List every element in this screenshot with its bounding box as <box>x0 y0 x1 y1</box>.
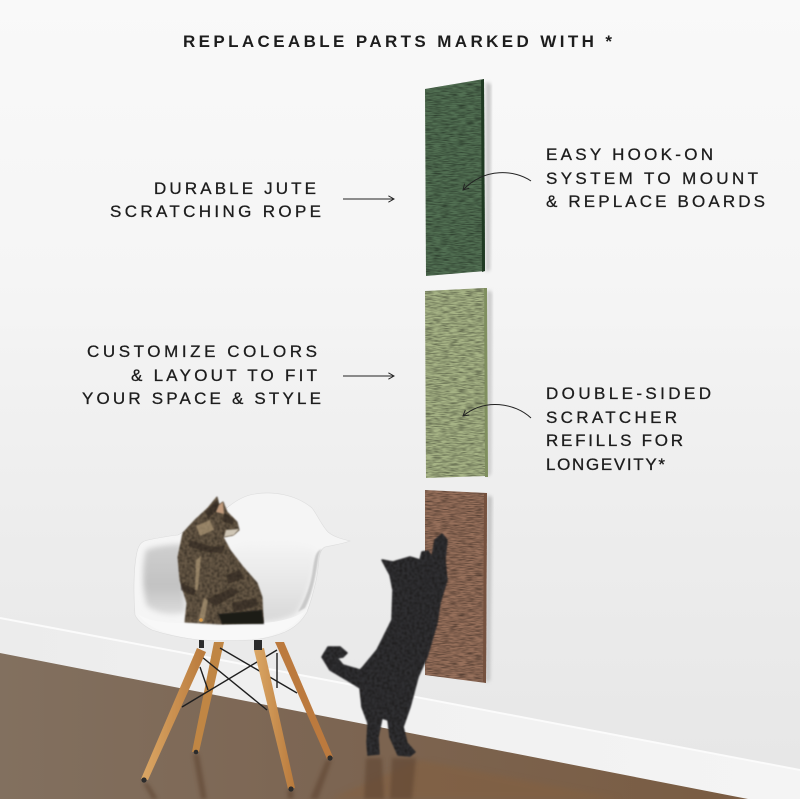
chair shell <box>134 493 350 641</box>
chair back-right leg <box>275 642 333 759</box>
tabby tail <box>218 610 264 624</box>
arrow: to sage board <box>343 375 394 377</box>
arrow: curved to sage board <box>463 404 531 418</box>
chair <box>134 493 350 792</box>
text block: hook-on system: & REPLACE BOARDS <box>546 192 765 211</box>
chair wire base <box>182 648 297 710</box>
black cat <box>322 534 447 756</box>
tabby muzzle <box>224 529 239 537</box>
text block: hook-on system: SYSTEM TO MOUNT <box>546 169 758 188</box>
tabby stripes <box>181 500 258 612</box>
leg and cat reflections <box>143 754 416 799</box>
tabby cat <box>178 497 264 624</box>
chair inner left shadow <box>143 544 186 614</box>
text block: double-sided refills: LONGEVITY* <box>546 455 665 474</box>
tabby ear <box>216 502 224 514</box>
text block: durable jute <box>110 179 321 221</box>
chair inner right shadow <box>232 541 316 622</box>
text block: hook-on system: EASY HOOK-ON <box>546 145 713 164</box>
text block: double-sided refills: SCRATCHER <box>546 408 677 427</box>
wall scratcher board: sage <box>425 288 492 478</box>
text block: durable jute: DURABLE JUTE <box>154 179 316 198</box>
tabby light patches <box>195 520 214 622</box>
baseboard <box>0 618 800 799</box>
arrow: curved to green board <box>463 173 531 190</box>
title: REPLACEABLE PARTS MARKED WITH * <box>183 32 612 51</box>
wooden floor <box>0 653 748 799</box>
chair arm inner strip <box>298 549 322 612</box>
wall scratcher board: brown <box>425 490 492 683</box>
text block: double-sided refills <box>546 384 711 474</box>
chair seat rim <box>138 612 304 640</box>
chair front-left leg <box>141 648 206 780</box>
text block: hook-on system <box>546 145 765 211</box>
text block: customize colors: CUSTOMIZE COLORS <box>87 342 317 361</box>
chair back-left leg <box>192 642 224 752</box>
text block: customize colors <box>82 342 321 408</box>
arrow: to green board <box>343 198 394 200</box>
text block: double-sided refills: REFILLS FOR <box>546 431 683 450</box>
text block: customize colors: & LAYOUT TO FIT <box>131 366 317 385</box>
text block: durable jute: SCRATCHING ROPE <box>110 202 321 221</box>
chair front-right leg <box>254 648 295 789</box>
wall scratcher board: green <box>425 79 491 276</box>
text block: customize colors: YOUR SPACE & STYLE <box>82 389 321 408</box>
text block: double-sided refills: DOUBLE-SIDED <box>546 384 711 403</box>
chair leg caps <box>141 640 333 792</box>
